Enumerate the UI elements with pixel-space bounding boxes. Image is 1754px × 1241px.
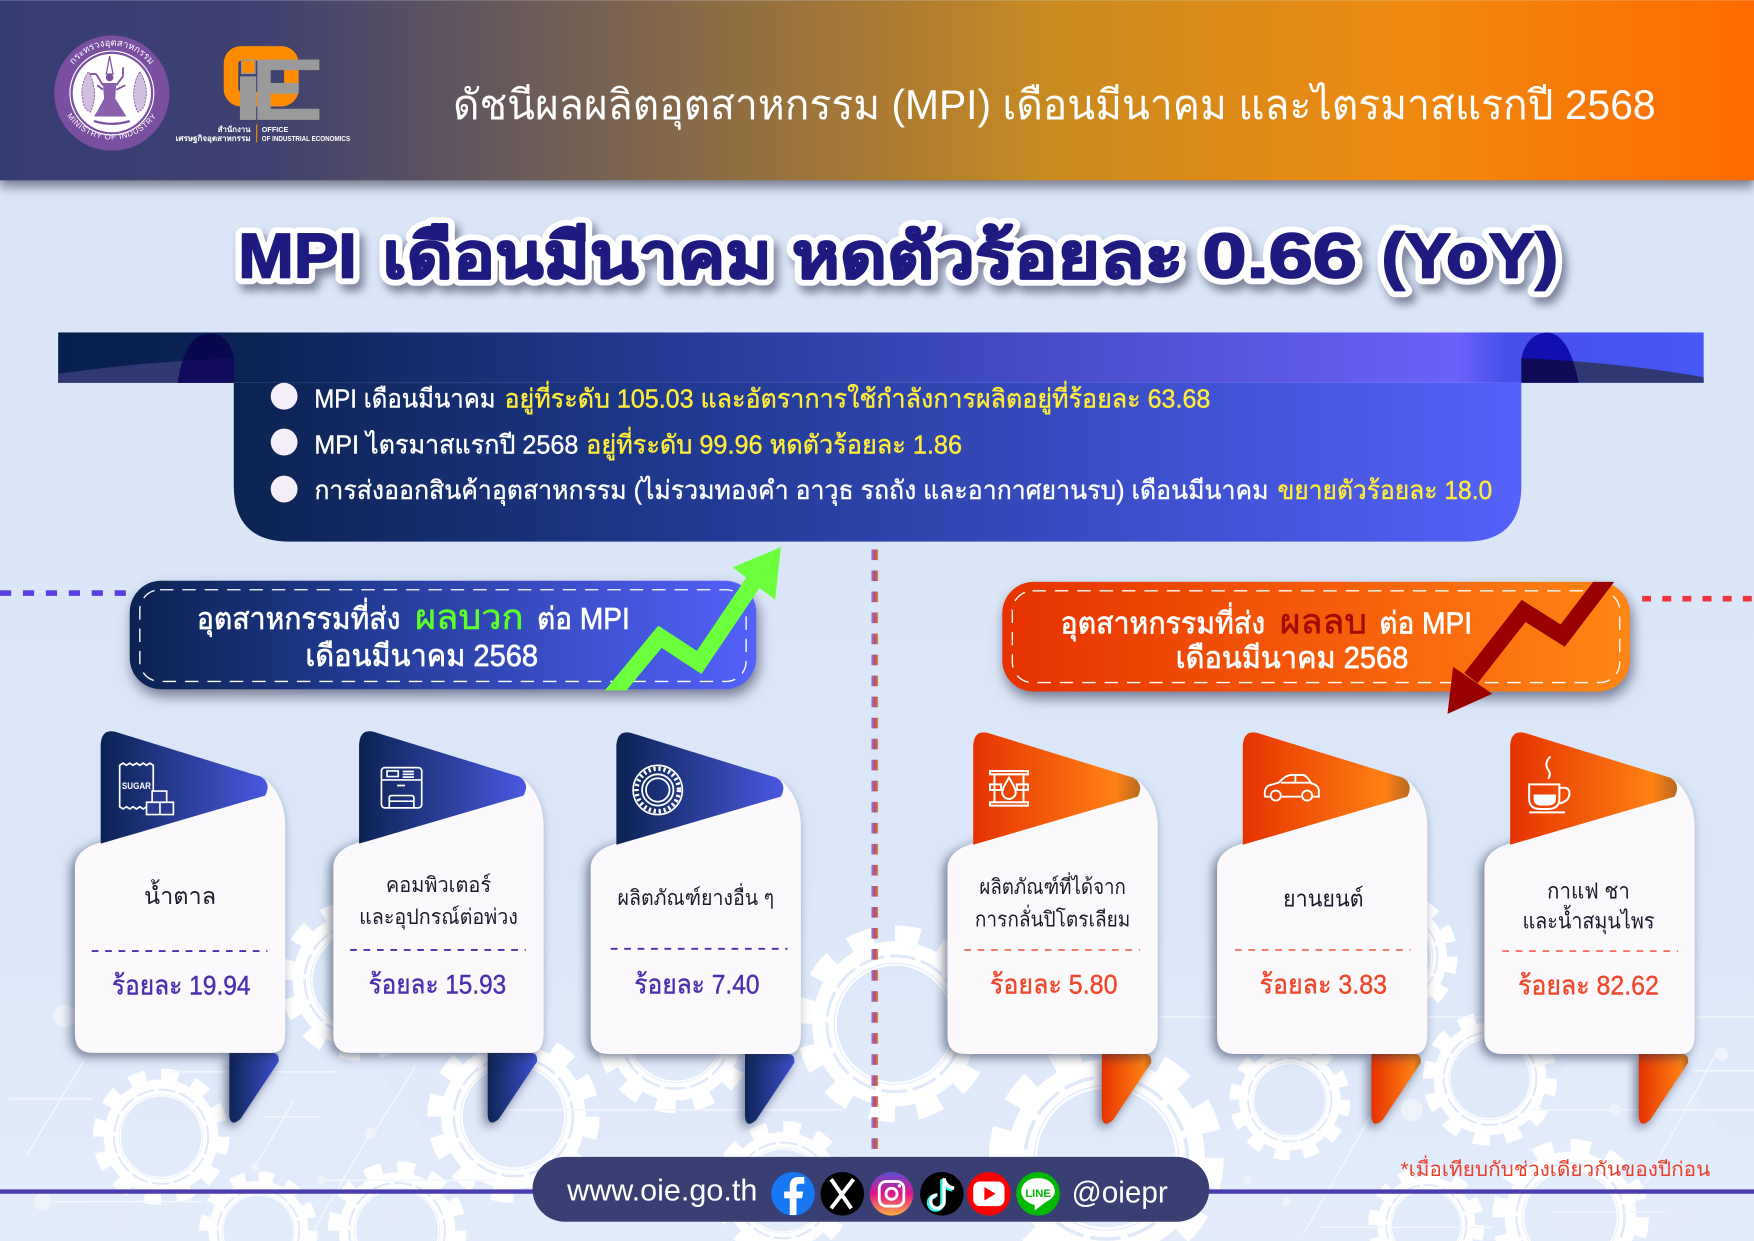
positive dotted line [0,591,130,596]
main title: MPI [238,222,357,292]
main title: หดตัวร้อยละ [792,222,1184,292]
card: coffee tea herbal [1484,732,1695,1124]
logo: OIE [176,53,350,144]
main title: เดือนมีนาคม [383,222,772,292]
logo: OIE: OF INDUSTRIAL ECONOMICS [262,134,350,143]
center dashed divider [872,549,878,1152]
positive heading box: ผลบวก [415,599,524,637]
icon: instagram [870,1172,913,1216]
background gears and network lines [9,898,1754,1241]
bullet list [271,380,1492,506]
main title: (YoY) [1381,222,1558,292]
main title: (YoY) [1381,222,1558,292]
card: coffee tea herbal: และน้ำสมุนไพร [1522,905,1654,935]
header bar [0,0,1754,194]
logo: OIE: สำนักงาน [218,125,251,134]
bullet list: MPI เดือนมีนาคม [314,385,496,413]
icon: tiktok [920,1172,964,1216]
negative heading box: ต่อ MPI [1379,607,1472,640]
card: automotive: ร้อยละ 3.83 [1260,970,1387,1000]
card: rubber products: ร้อยละ 7.40 [634,970,760,1000]
bullet list: การส่งออกสินค้าอุตสาหกรรม (ไม่รวมทองคำ อาวุธ รถถัง และอากาศยานรบ) เดือนมีนาคม [314,476,1269,506]
bullet list: MPI ไตรมาสแรกปี 2568 [314,430,578,459]
bullet list: ขยายตัวร้อยละ 18.0 [1277,477,1492,505]
icon: green rising arrow [604,547,781,690]
card: computers [333,731,544,1123]
negative heading box [1002,582,1630,692]
logo: OIE: เศรษฐกิจอุตสาหกรรม [176,134,251,144]
card: rubber products [591,732,801,1124]
card: computers: ร้อยละ 15.93 [369,970,506,1000]
icon: computer printer [381,768,422,808]
logo: OIE: OFFICE [262,125,289,134]
main title: เดือนมีนาคม [383,222,772,292]
main title [238,222,1558,292]
card: computers: คอมพิวเตอร์ [386,873,491,897]
icon: sugar bag [120,763,173,815]
negative heading box: ผลลบ [1280,603,1367,641]
card: sugar: ร้อยละ 19.94 [112,971,251,1001]
negative dotted line [1642,596,1754,601]
main title: 0.66 [1203,222,1357,292]
icon: oil barrel [990,771,1028,806]
icon: youtube [967,1172,1011,1216]
icon: line [1016,1172,1060,1216]
icon: tyre [633,765,682,815]
icon: facebook [771,1172,815,1216]
footer contact pill [532,1157,1209,1222]
card: coffee tea herbal: ร้อยละ 82.62 [1518,971,1659,1001]
logo: Ministry of Industry seal: MINISTRY OF INDUSTRY [67,113,155,140]
header title: ดัชนีผลผลิตอุตสาหกรรม (MPI) เดือนมีนาคม และไตรมาสแรกปี 2568 [453,82,1656,130]
positive heading box: อุตสาหกรรมที่ส่ง [197,598,400,638]
footer rule [0,1190,1754,1194]
card: automotive: ยานยนต์ [1283,885,1364,911]
negative heading box: อุตสาหกรรมที่ส่ง [1060,602,1265,642]
positive heading box: ต่อ MPI [537,603,630,636]
card: sugar: น้ำตาล [144,879,216,909]
card: petroleum: การกลั่นปิโตรเลียม [975,904,1130,931]
icon: coffee cup [1529,756,1569,812]
card: petroleum: ร้อยละ 5.80 [990,970,1118,1000]
icon: car [1265,775,1319,801]
footnote: *เมื่อเทียบกับช่วงเดียวกันของปีก่อน [1401,1155,1711,1181]
negative heading box: เดือนมีนาคม 2568 [1176,642,1408,675]
positive heading box [130,581,756,689]
main title: 0.66 [1203,222,1357,292]
icon: X [821,1172,864,1216]
main title: หดตัวร้อยละ [792,222,1184,292]
panel: summary ribbon [58,332,1704,542]
icon: dark red falling arrow [1448,582,1614,714]
icon: sugar bag: SUGAR [122,781,151,792]
card: sugar [75,731,285,1123]
card: petroleum: ผลิตภัณฑ์ที่ได้จาก [979,872,1126,899]
card: petroleum [947,732,1158,1124]
icon: line: LINE [1025,1188,1051,1200]
card: computers: และอุปกรณ์ต่อพ่วง [359,905,518,930]
card: automotive [1217,732,1427,1124]
logo: Ministry of Industry seal [54,36,170,151]
logo: Ministry of Industry seal: กระทรวงอุตสาหกรรม [70,40,154,64]
social handle: @oiepr [1072,1177,1168,1210]
website url: www.oie.go.th [566,1175,757,1208]
positive heading box: เดือนมีนาคม 2568 [305,640,538,673]
card: rubber products: ผลิตภัณฑ์ยางอื่น ๆ [617,883,774,910]
card: coffee tea herbal: กาแฟ ชา [1547,878,1630,903]
bullet list: อยู่ที่ระดับ 105.03 และอัตราการใช้กำลังการผลิตอยู่ที่ร้อยละ 63.68 [504,380,1210,414]
main title: MPI [238,222,357,292]
bullet list: อยู่ที่ระดับ 99.96 หดตัวร้อยละ 1.86 [586,426,962,460]
